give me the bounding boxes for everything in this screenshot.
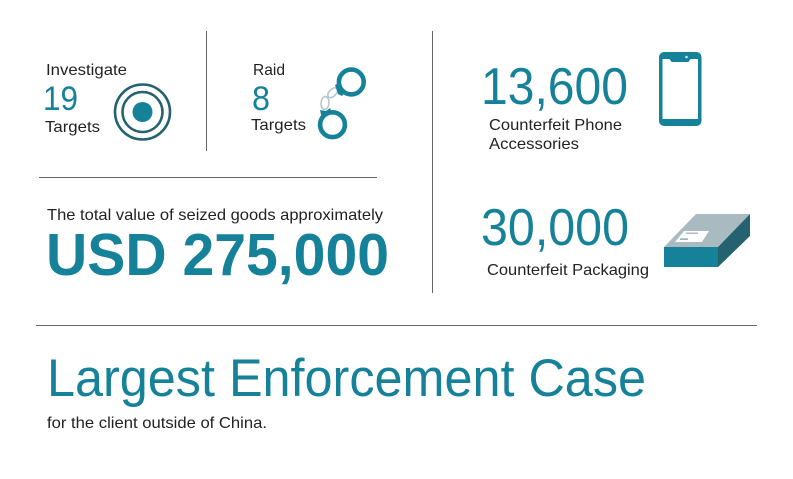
text: Counterfeit Packaging: Counterfeit Packaging (487, 262, 649, 279)
text: for the client outside of China: for the client outside of China. (47, 415, 267, 432)
panel: investigate (43, 62, 170, 140)
panel: raid (251, 62, 364, 137)
label: Targets: Targets (251, 117, 306, 134)
label: Investigate: Investigate (46, 62, 127, 79)
panel: phone accessories (481, 52, 702, 153)
label: Raid: Raid (253, 62, 285, 79)
text: Counterfeit Phone Accessories: Accessories (489, 136, 579, 153)
panel: total seized value (46, 207, 389, 288)
number: 30,000: 30,000 (481, 199, 629, 257)
number: 19: 19 (43, 80, 78, 118)
icon: smartphone (659, 52, 702, 126)
number: 13,600: 13,600 (481, 58, 628, 116)
label: Targets: Targets (45, 119, 100, 136)
text: Counterfeit Phone Accessories (489, 117, 622, 153)
text: Counterfeit Phone Accessories: Counterfeit Phone (489, 117, 622, 134)
number: 8: 8 (252, 80, 270, 118)
number: USD 275,000: USD 275,000 (46, 222, 389, 288)
text: seized goods intro: The total value of seized goods approximately (47, 207, 383, 224)
panel: largest case (47, 349, 646, 432)
icon: target (115, 84, 170, 140)
panel: packaging (481, 199, 750, 279)
heading: Largest Enforcement Case: Largest Enforcement Case (47, 349, 646, 408)
icon: package box (664, 214, 750, 267)
icon: handcuffs (320, 70, 364, 137)
